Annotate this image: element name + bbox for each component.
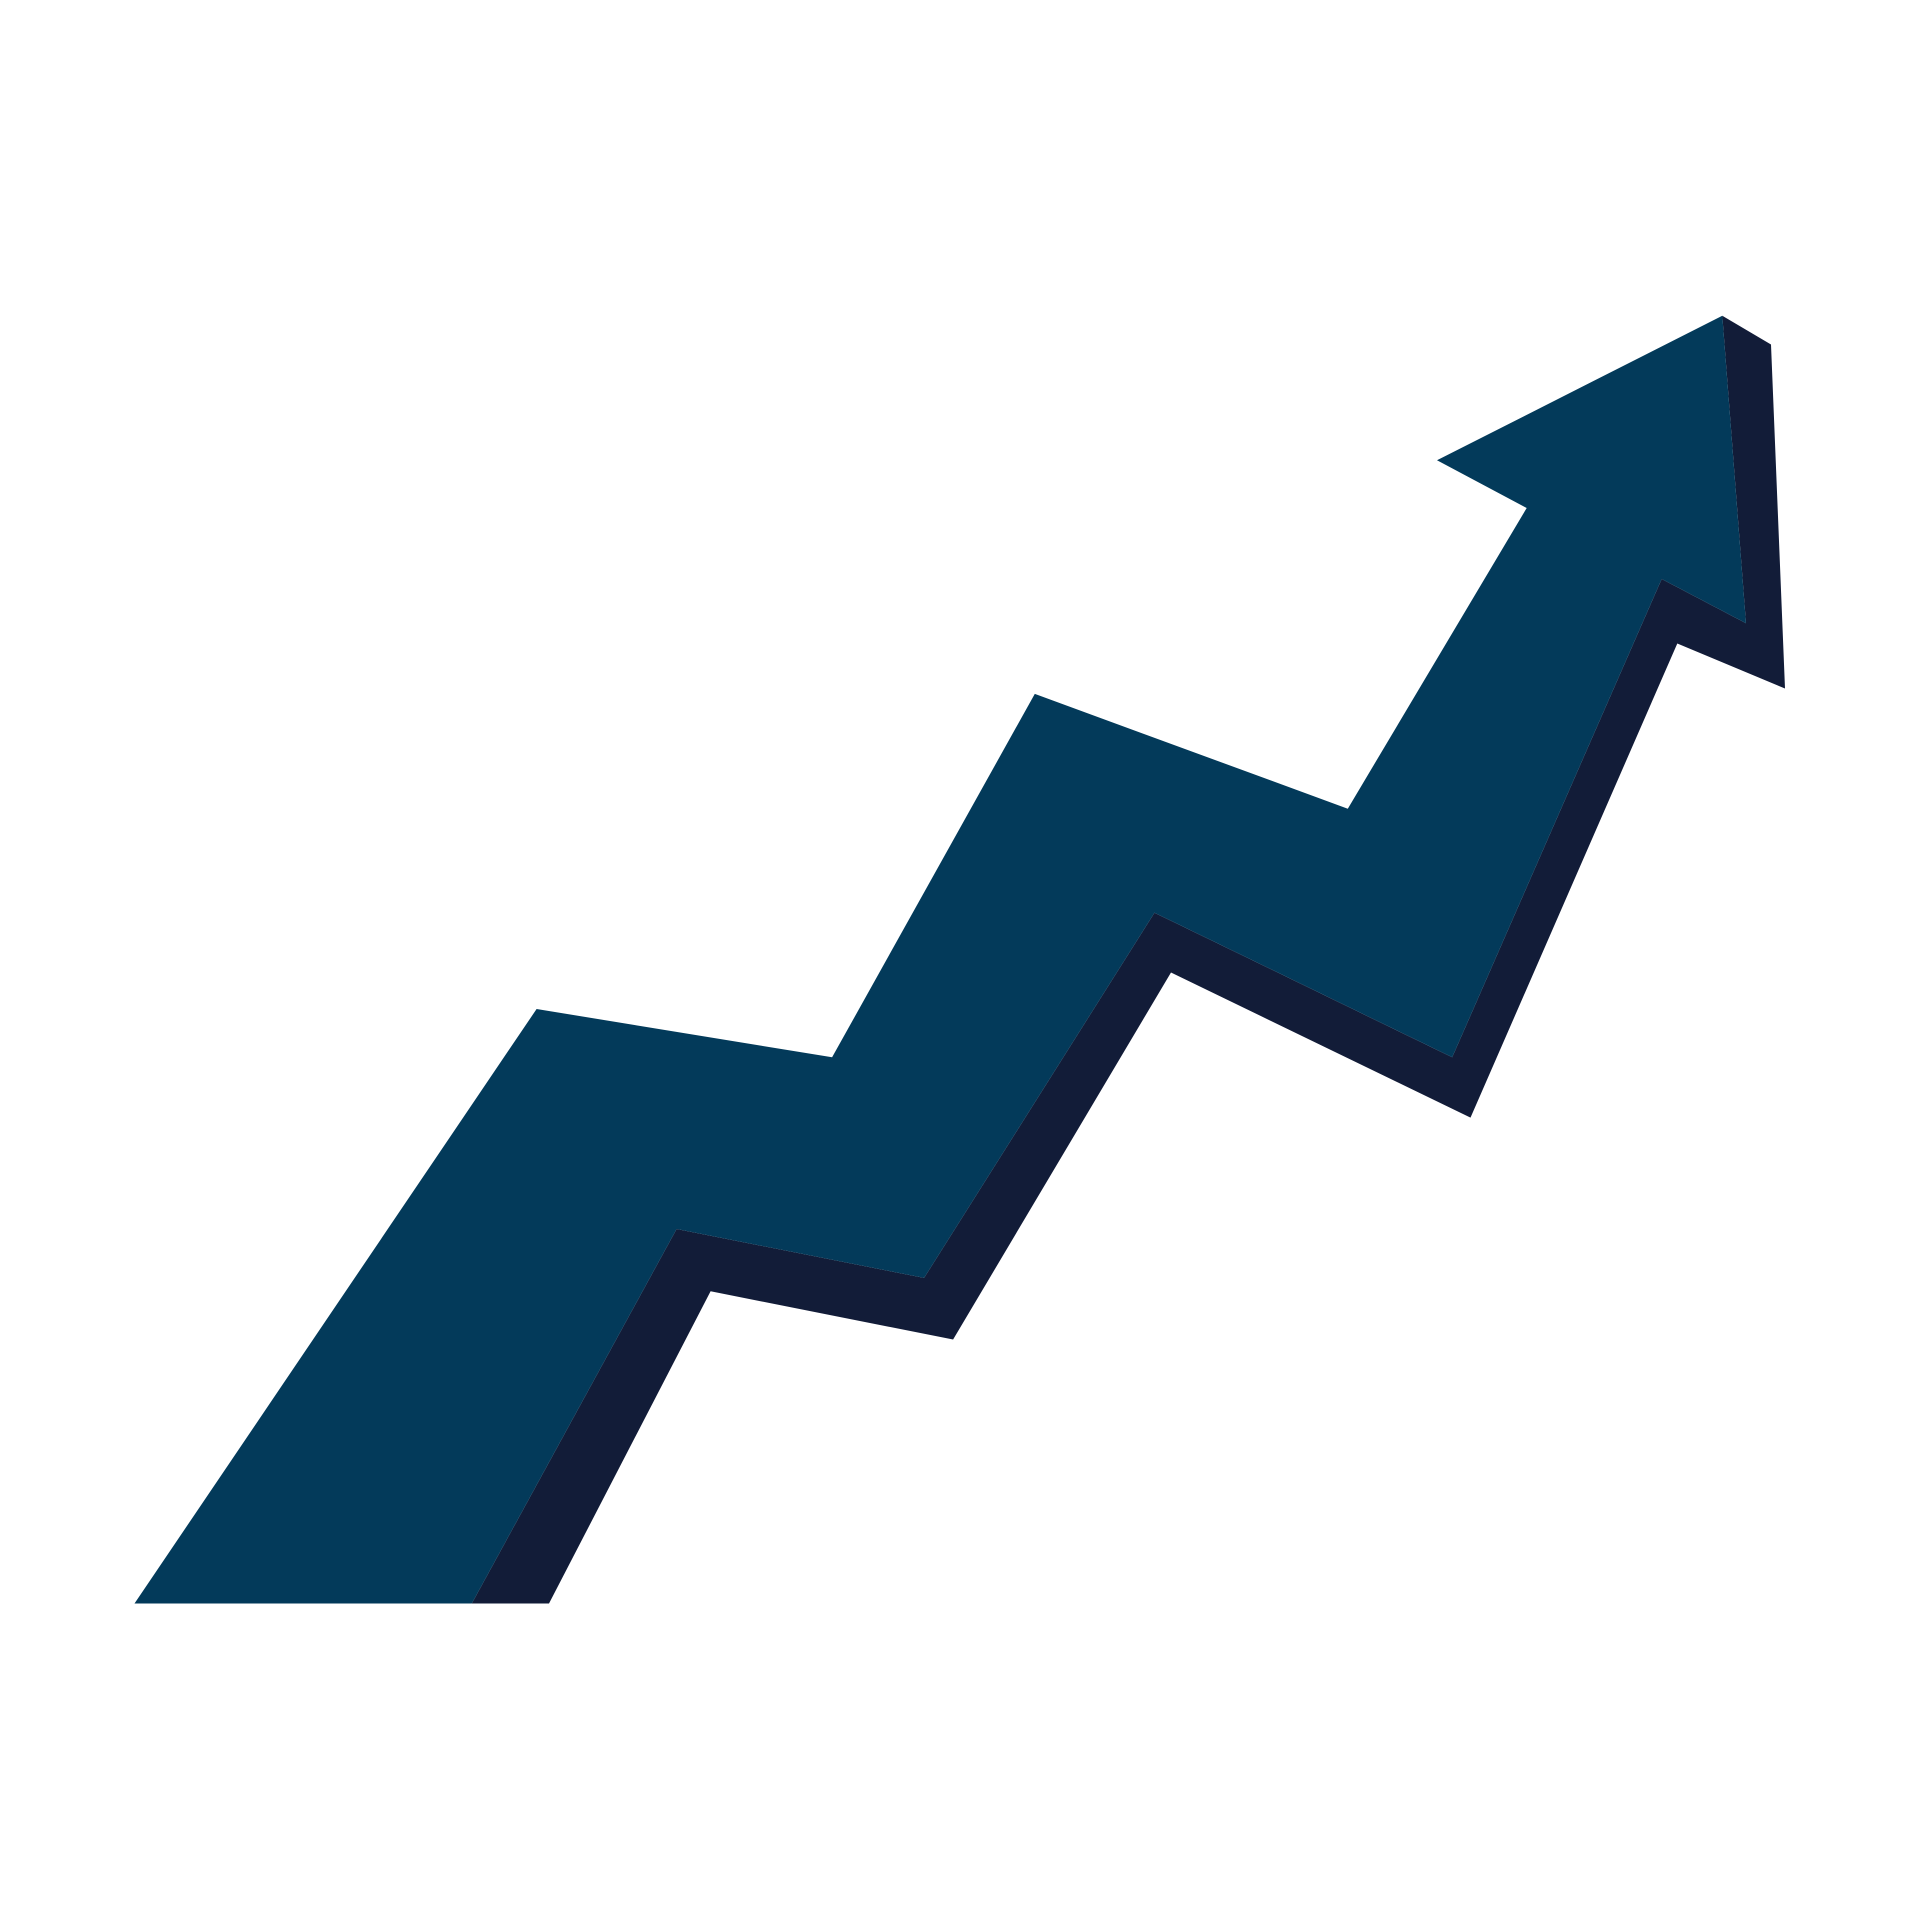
arrow shadow side [472,316,1785,1604]
arrow front face [134,316,1746,1604]
